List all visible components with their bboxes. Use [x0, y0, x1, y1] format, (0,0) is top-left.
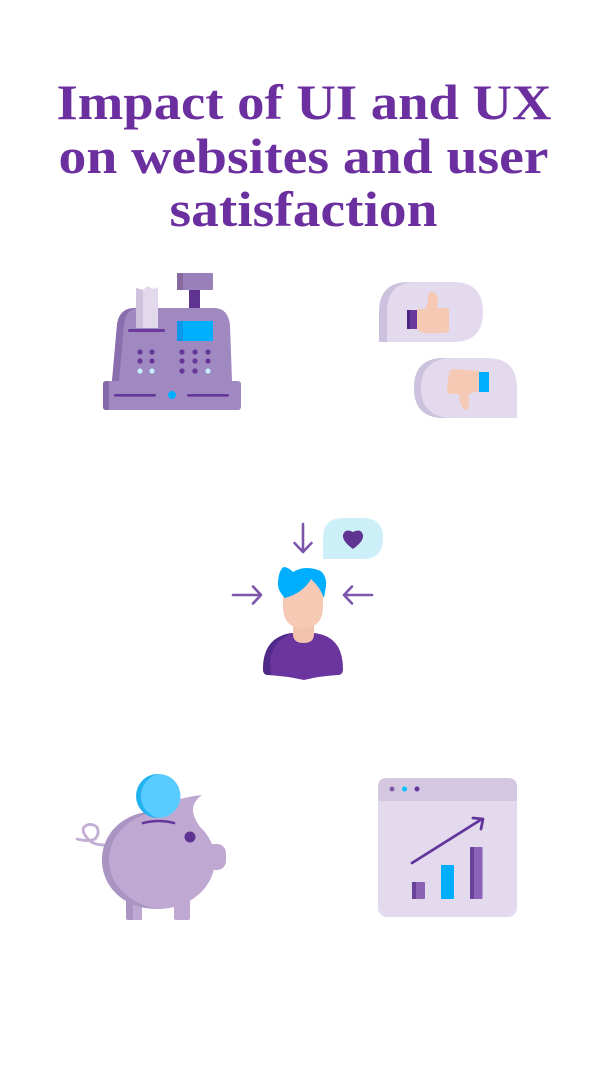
coin — [136, 774, 180, 818]
register base — [103, 381, 241, 410]
register display — [177, 273, 213, 309]
bar chart — [412, 847, 482, 899]
coin slot — [143, 821, 174, 823]
thumbs down hand — [447, 369, 489, 410]
icon: thumbs up and down bubbles — [379, 282, 517, 418]
icon: user with heart feedback — [233, 518, 383, 680]
register body — [112, 308, 232, 381]
pig snout — [205, 844, 226, 870]
user neck — [293, 622, 314, 643]
icon: piggy bank with coin — [77, 774, 226, 920]
pig tail — [77, 824, 104, 845]
thumbs down bubble — [414, 358, 517, 418]
browser window — [378, 778, 517, 917]
title: Impact of UI and UX — [56, 74, 552, 130]
pig body — [102, 811, 215, 909]
icon: cash register — [103, 273, 241, 410]
user face — [283, 578, 323, 628]
icon: browser window with growth chart — [378, 778, 517, 917]
keypad — [137, 349, 211, 374]
growth arrow — [412, 818, 483, 863]
title — [56, 74, 552, 237]
user hair — [278, 567, 326, 598]
user body — [263, 633, 343, 680]
pig legs — [126, 895, 190, 920]
title: satisfaction — [170, 181, 438, 237]
arrows pointing to user — [233, 524, 372, 604]
browser header — [378, 778, 517, 801]
pig ear — [172, 795, 204, 832]
thumbs up hand — [407, 292, 449, 333]
window dots — [390, 786, 420, 792]
body shade — [112, 308, 136, 381]
pig eye — [184, 832, 196, 842]
thumbs up bubble — [379, 282, 483, 342]
title: on websites and user — [58, 128, 548, 184]
register screen — [177, 321, 213, 341]
paper receipt — [128, 286, 165, 332]
heart speech bubble — [323, 518, 383, 559]
